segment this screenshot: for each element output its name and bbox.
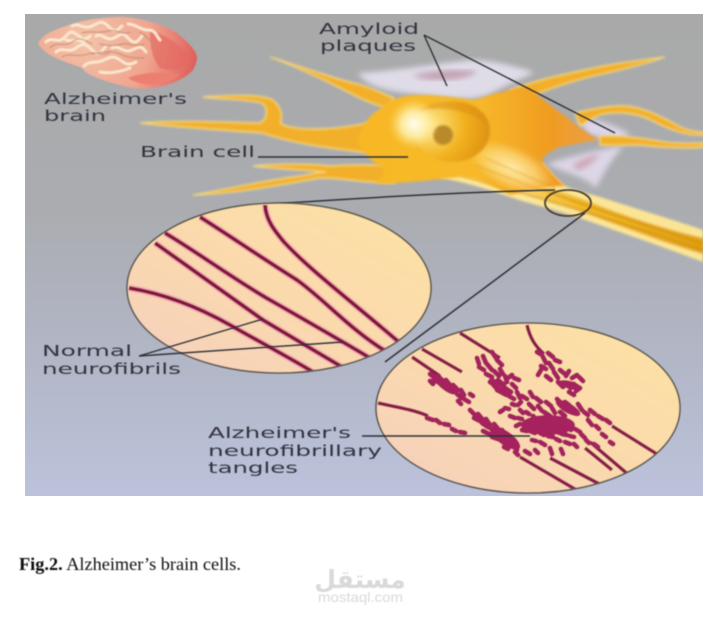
tangled fibrils [378,325,660,492]
leader lines [139,35,615,436]
label: Alzheimer's neurofibrillary tangles: neurofibrillary [208,442,382,460]
tangle clusters [427,352,613,455]
central tangle mass [438,378,581,450]
label: Alzheimer's neurofibrillary tangles: tangles [208,459,298,477]
illustration panel background [25,14,703,496]
label: Normal neurofibrils: Normal [42,342,132,360]
plaques: amyloid deposits [358,60,630,188]
label: Alzheimer's brain: brain [44,107,106,125]
label: Alzheimer's brain: Alzheimer's [44,90,187,108]
watermark: mostaql: mostaql.com [318,589,403,605]
fibrils [129,205,400,372]
lens: normal neurofibrils [127,203,431,373]
label: Alzheimer's neurofibrillary tangles [208,424,382,477]
label: Alzheimer's neurofibrillary tangles: Alzheimer's [208,424,351,442]
label: Amyloid plaques: Amyloid [319,20,419,38]
label: Normal neurofibrils: neurofibrils [42,360,181,378]
illustration: neuron and lenses [38,17,703,493]
label: Amyloid plaques [319,20,419,55]
callout lines from neuron to lenses [272,190,591,362]
label: Alzheimer's brain [44,92,186,122]
label: Normal neurofibrils [43,344,180,375]
watermark: mostaql: مستقل [314,565,406,594]
icon: Alzheimer's brain [38,17,197,89]
neuron: cell body [358,88,600,207]
neuron: axon [440,162,703,262]
nucleolus [433,125,453,145]
caption: Fig.2. Alzheimer’s brain cells. [19,554,241,574]
magnifier ring on the axon [545,190,591,216]
label: Brain cell: Brain cell [140,143,255,161]
neuron: nucleus [389,99,490,162]
neuron: dendrites [140,57,703,195]
label: Amyloid plaques: plaques [320,37,416,55]
lens: neurofibrillary tangles [376,323,680,493]
